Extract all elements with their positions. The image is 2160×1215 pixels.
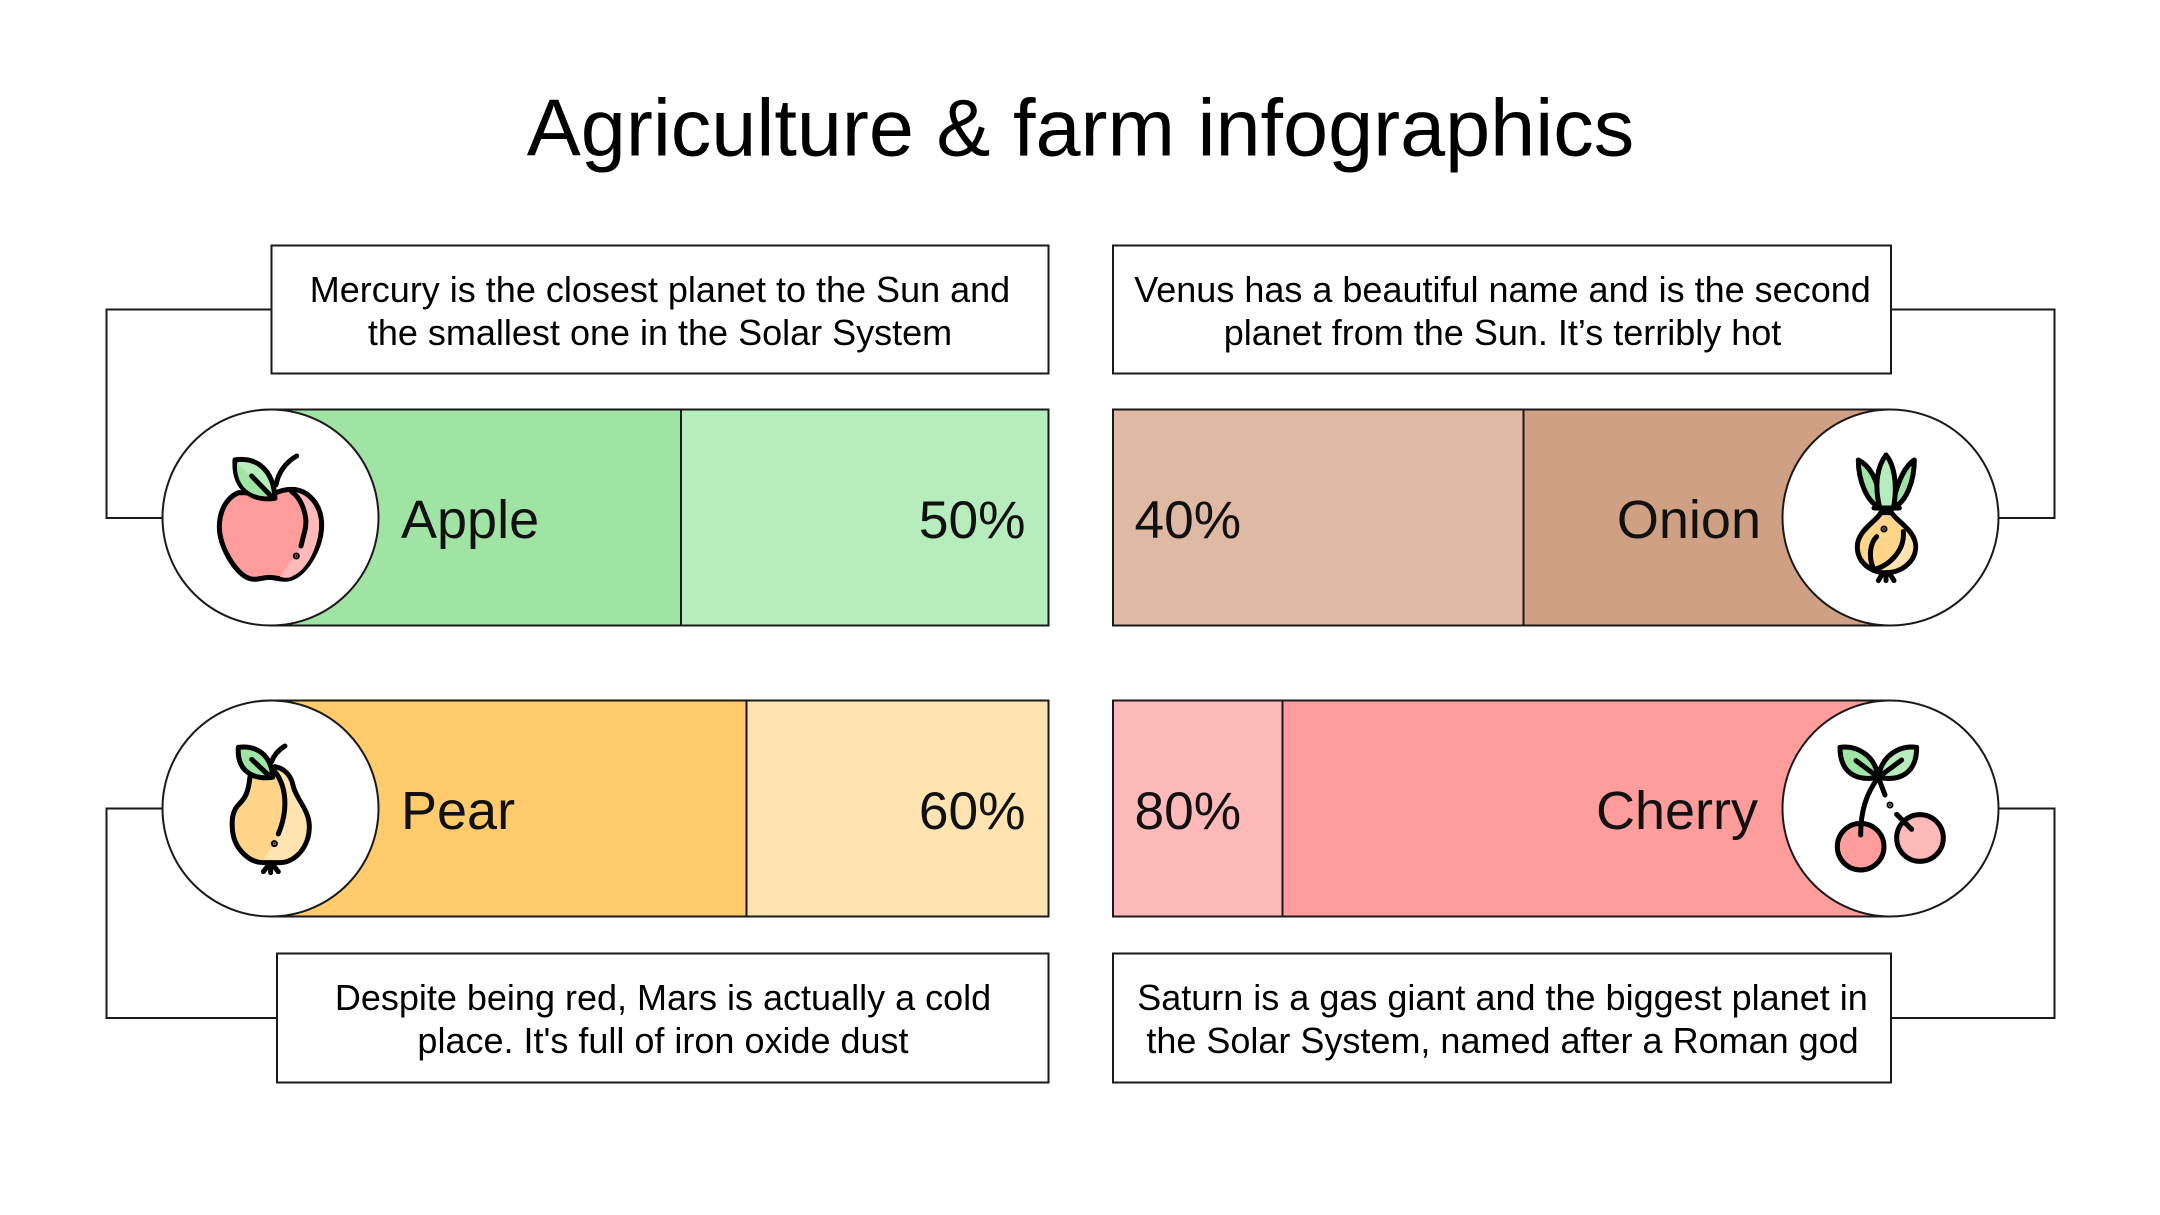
- value: apple: 50%: [919, 491, 1026, 550]
- connector: pear: [106, 808, 277, 1018]
- value: cherry: 80%: [1134, 782, 1241, 841]
- panel: pear: [106, 700, 1048, 1082]
- label: onion: Onion: [1617, 490, 1761, 550]
- description: cherry: [1113, 954, 1891, 1082]
- description: pear: Despite being red, Mars is actually a cold: [335, 977, 991, 1018]
- value: onion: 40%: [1134, 491, 1241, 550]
- description: cherry: Saturn is a gas giant and the biggest planet in: [1137, 977, 1868, 1018]
- label: apple: Apple: [401, 490, 539, 550]
- panel: apple: [106, 246, 1048, 626]
- label: pear: Pear: [401, 781, 515, 841]
- icon: apple: [162, 410, 378, 626]
- panel: onion: [1113, 246, 2054, 626]
- label: cherry: Cherry: [1596, 781, 1758, 841]
- description: apple: [272, 246, 1048, 374]
- icon: onion: [1782, 410, 1998, 626]
- bar: cherry: [1113, 700, 1890, 916]
- description: pear: [277, 954, 1048, 1082]
- connector: cherry: [1891, 808, 2054, 1018]
- description: apple: Mercury is the closest planet to the Sun and: [310, 269, 1010, 310]
- connector: onion: [1891, 310, 2054, 518]
- description: cherry: the Solar System, named after a Roman god: [1146, 1020, 1859, 1061]
- bar: onion: [1113, 410, 1890, 626]
- bar: apple: [270, 410, 1048, 626]
- description: onion: [1113, 246, 1891, 374]
- icon: cherry: [1782, 700, 1998, 916]
- connector: apple: [106, 310, 272, 518]
- description: onion: Venus has a beautiful name and is the second: [1134, 269, 1871, 310]
- value: pear: 60%: [919, 782, 1026, 841]
- icon: pear: [162, 700, 378, 916]
- title: Agriculture & farm infographics: [527, 84, 1634, 174]
- description: apple: the smallest one in the Solar System: [368, 312, 952, 353]
- bar: pear: [270, 700, 1048, 916]
- description: onion: planet from the Sun. It’s terribly hot: [1224, 312, 1781, 353]
- panel: cherry: [1113, 700, 2054, 1082]
- description: pear: place. It's full of iron oxide dust: [417, 1020, 909, 1061]
